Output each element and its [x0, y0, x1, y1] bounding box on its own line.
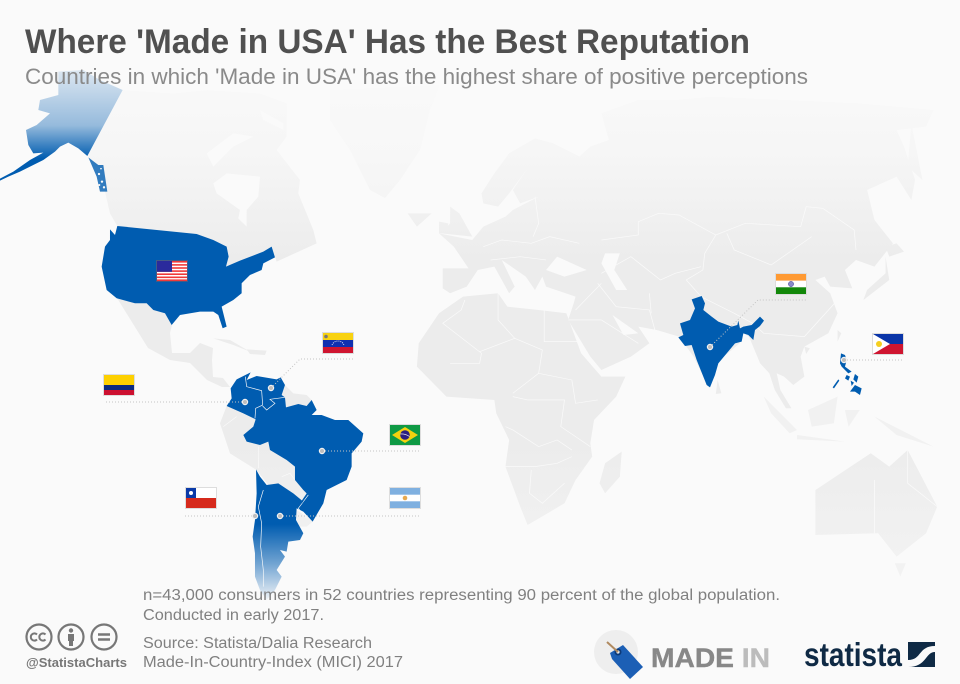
countries: Colombia, Venezuela, Brazil: [227, 372, 363, 522]
made in label: MADE IN: [651, 643, 770, 673]
icon: made in tag: [594, 630, 643, 679]
flag: Chile: [185, 487, 217, 509]
handle: @StatistaCharts: [26, 656, 127, 670]
statista logo mark: [908, 642, 935, 667]
flag: Venezuela: [322, 332, 354, 354]
leader lines: [104, 300, 903, 516]
countries: Chile and Argentina: [253, 469, 303, 600]
source: Made-In-Country-Index (MICI) 2017: [143, 654, 403, 671]
flag: Argentina: [389, 487, 421, 509]
country: India: [678, 296, 764, 387]
note: [143, 587, 780, 624]
source: Source: Statista/Dalia Research: [143, 635, 372, 652]
subtitle: Countries in which 'Made in USA' has the highest share of positive perceptions: [25, 64, 808, 89]
flag: Colombia: [103, 374, 135, 396]
flag: India: [775, 273, 807, 295]
note: n=43,000 consumers in 52 countries representing 90 percent of the global population.: [143, 587, 780, 604]
flag: Philippines: [872, 333, 904, 355]
title: Where 'Made in USA' Has the Best Reputation: [25, 23, 750, 61]
country: Philippines: [833, 353, 862, 395]
note: Conducted in early 2017.: [143, 607, 324, 624]
flag: Brazil: [389, 424, 421, 446]
source: [143, 635, 403, 671]
country: USA: [0, 70, 275, 328]
statista wordmark: statista: [804, 636, 903, 673]
icons: creative commons licence: [26, 624, 116, 650]
highlighted countries: [0, 70, 862, 600]
location dots: [242, 344, 847, 519]
flag: USA: [156, 260, 188, 282]
